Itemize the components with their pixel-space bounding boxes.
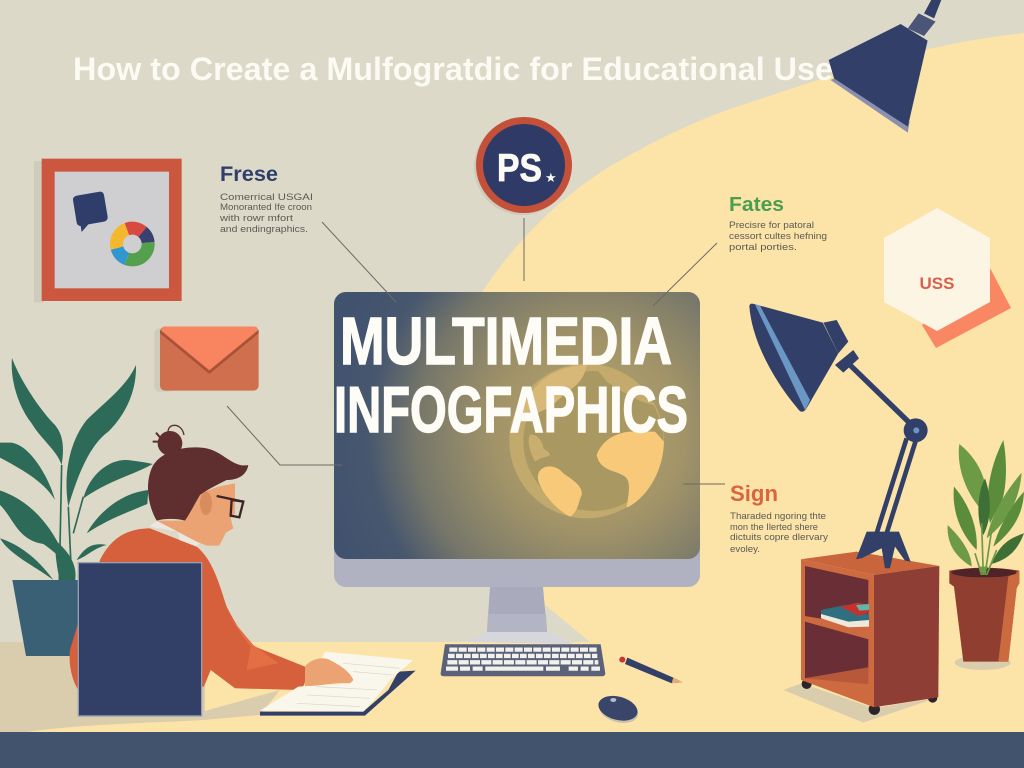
lamp base [856,532,911,568]
monitor screen [334,292,700,559]
callout: Fates: cessort cultes hefning [729,231,827,241]
pencil [619,657,682,683]
collar [149,521,200,547]
callout: Sign [730,481,828,554]
callout: Sign: mon the Ilerted shere [730,522,818,532]
lamp arm [850,365,916,533]
right plant [948,440,1024,670]
icon: colour wheel [110,222,155,266]
globe [509,364,664,518]
callout: Fates: Fates [729,194,784,216]
callout: Fates [729,194,827,252]
chair back [78,563,202,716]
callout: Sign: dictuits copre dlervary [730,532,828,542]
PS badge: PS [497,147,542,190]
plant leaves [948,440,1024,575]
sweater [70,528,306,690]
PS badge [474,117,572,215]
plant pot [12,580,80,656]
callout: Frese: Monoranted Ife croon [220,202,312,212]
callout: Fates: Precisre for patoral [729,220,814,230]
hexagon badge USS [884,208,1011,348]
callout: Frese [219,163,313,234]
left plant [0,358,153,656]
hair [148,447,248,521]
monitor stand shadow [470,605,590,642]
neck and face [157,483,235,546]
callout: Sign: evoley. [730,544,760,554]
callout: Fates: portal porties. [729,242,797,252]
desk surface [0,642,1024,735]
monitor stand [487,587,547,632]
envelope icon [154,327,259,392]
monitor headline: MULTIMEDIA [340,304,672,379]
callout: Frese: Comerrical USGAI [220,192,313,202]
plant pot [949,568,1019,662]
title: How to Create a Mulfogratdic for Educational Use [73,51,833,87]
lamp joint [904,418,928,442]
glasses [217,496,243,517]
monitor bezel [334,292,700,587]
side shelf [783,552,939,723]
icon: speech bubble [73,192,108,232]
desk lamp [749,304,928,568]
hanging lamp [829,0,941,133]
person at desk [70,425,306,716]
callout: Frese: Frese [220,163,278,186]
hair bun [153,425,184,456]
keyboard [441,644,682,727]
hexagon badge USS: USS [920,274,954,293]
PS badge: ★ [545,170,557,185]
callout: Frese: with rowr mfort [219,213,294,223]
callout: Sign: Tharaded ngoring thte [730,511,826,521]
callout: Frese: and endingraphics. [220,224,308,234]
plant shadow [955,655,1011,670]
mouse [596,692,641,727]
bottom bar [0,732,1024,768]
monitor [334,292,700,644]
picture frame [34,159,182,302]
hand [305,658,353,686]
books [821,603,869,627]
connector lines [227,218,725,484]
monitor: INFOGFAPHICS [334,373,688,446]
desk shadow [0,642,280,733]
yellow light beam [482,33,1024,768]
open book [260,652,416,716]
lamp shade [749,304,838,412]
callout: Sign: Sign [730,481,778,506]
